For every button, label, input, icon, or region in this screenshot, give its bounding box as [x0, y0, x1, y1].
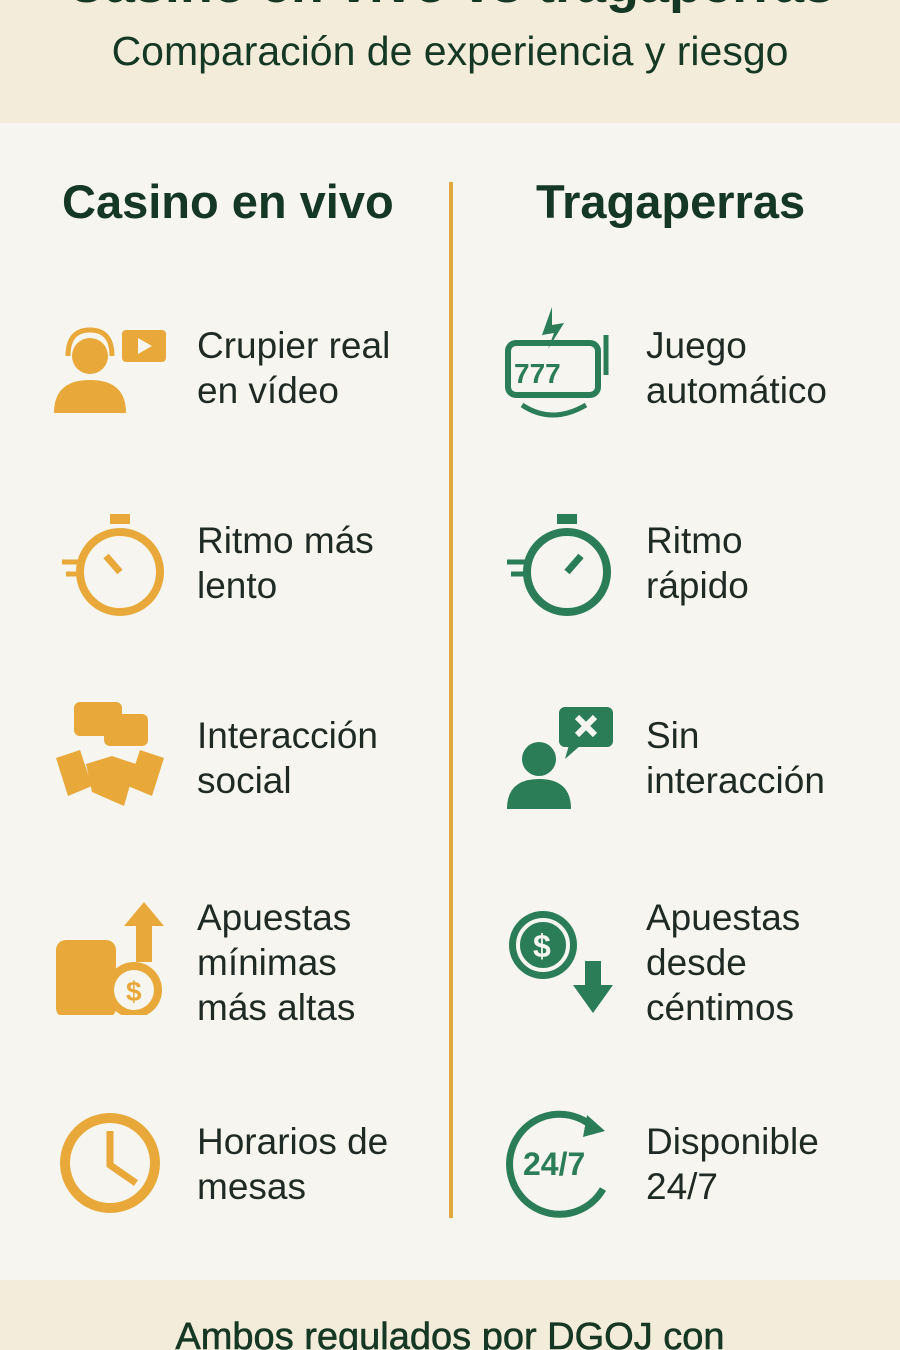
text: horarios de mesas: Horarios de — [197, 1121, 388, 1162]
text: sin interaccion: Sin — [646, 715, 699, 756]
icon: slot machine — [505, 307, 608, 418]
text: disponible 24/7: Disponible — [646, 1121, 819, 1162]
text: horarios de mesas — [197, 1121, 388, 1207]
text: sin interaccion — [646, 715, 825, 801]
subtitle: Comparación de experiencia y riesgo — [112, 28, 788, 74]
header band — [0, 0, 900, 123]
text: horarios de mesas: mesas — [197, 1166, 306, 1207]
icon: coins up — [56, 902, 164, 1015]
column heading: tragaperras: Tragaperras — [536, 175, 805, 228]
icon: coin down — [509, 911, 613, 1013]
text: apuestas centimos — [646, 897, 800, 1028]
icon: chat handshake — [56, 702, 164, 806]
text: apuestas centimos: Apuestas — [646, 897, 800, 938]
text: apuestas minimas: más altas — [197, 987, 355, 1028]
icon: stopwatch slow — [62, 514, 164, 616]
icon: clock — [60, 1113, 160, 1213]
text: interaccion social: social — [197, 760, 292, 801]
text: sin interaccion: interacción — [646, 760, 825, 801]
text: crupier: Crupier real — [197, 325, 390, 366]
icon: coin down: $ — [533, 928, 551, 964]
icon: dealer video — [54, 328, 166, 413]
text: ritmo rapido: rápido — [646, 565, 749, 606]
text: juego automatico — [646, 325, 827, 411]
text: juego automatico: automático — [646, 370, 827, 411]
text: crupier — [197, 325, 390, 411]
icon: 24/7: 24/7 — [523, 1146, 585, 1182]
text: disponible 24/7 — [646, 1121, 819, 1207]
column heading: casino en vivo: Casino en vivo — [62, 175, 394, 228]
text: ritmo rapido: Ritmo — [646, 520, 743, 561]
text: apuestas minimas: mínimas — [197, 942, 337, 983]
text: apuestas centimos: céntimos — [646, 987, 794, 1028]
text: apuestas minimas: Apuestas — [197, 897, 351, 938]
icon: coins up: $ — [126, 976, 142, 1007]
divider line — [449, 182, 453, 1218]
text: ritmo lento: Ritmo más — [197, 520, 374, 561]
text: ritmo rapido — [646, 520, 749, 606]
text: crupier: en vídeo — [197, 370, 339, 411]
icon: 24/7 — [506, 1110, 606, 1218]
icon: stopwatch fast — [507, 514, 611, 616]
text: apuestas centimos: desde — [646, 942, 747, 983]
text: ritmo lento — [197, 520, 374, 606]
icon: no chat — [507, 707, 613, 809]
text: juego automatico: Juego — [646, 325, 747, 366]
text: ritmo lento: lento — [197, 565, 277, 606]
footer band — [0, 1280, 900, 1350]
text: interaccion social: Interacción — [197, 715, 378, 756]
text: interaccion social — [197, 715, 378, 801]
text: disponible 24/7: 24/7 — [646, 1166, 718, 1207]
text: apuestas minimas — [197, 897, 355, 1028]
icon: slot machine: 777 — [514, 358, 561, 389]
